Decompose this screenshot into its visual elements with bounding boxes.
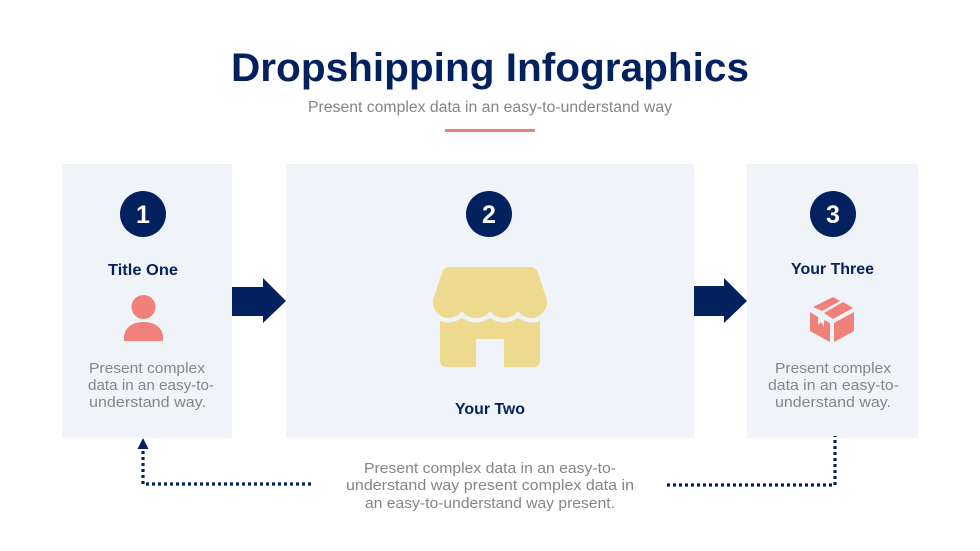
number badge 1 <box>120 191 166 237</box>
heading: your two: Your Two <box>455 401 525 418</box>
text block: step one: data in an easy-to- <box>88 377 214 394</box>
panel: step two <box>286 164 694 438</box>
text block: bottom description: understand way present complex data in <box>346 477 634 494</box>
number badge 2 <box>466 191 512 237</box>
text block: step three <box>768 360 899 411</box>
panel: step one <box>62 164 232 438</box>
text block: bottom description: an easy-to-understand way present. <box>365 495 615 512</box>
arrow: step one to two <box>232 278 286 323</box>
heading: title one: Title One <box>108 262 178 279</box>
text block: bottom description: Present complex data in an easy-to- <box>364 460 616 477</box>
text block: step three: Present complex <box>775 360 892 377</box>
number badge 3: 3 <box>826 201 840 229</box>
number badge 3 <box>810 191 856 237</box>
icon: package box <box>810 297 854 342</box>
text block: step three: data in an easy-to- <box>768 377 899 394</box>
arrow: step two to three <box>694 278 747 323</box>
number badge 2: 2 <box>482 201 496 229</box>
text block: step one <box>88 360 214 411</box>
text block: step three: understand way. <box>775 394 891 411</box>
dotted connector: right <box>667 436 835 485</box>
text block: step one: understand way. <box>89 394 206 411</box>
heading: your three: Your Three <box>791 261 874 278</box>
number badge 1: 1 <box>136 201 150 229</box>
icon: person <box>124 295 163 341</box>
dotted return arrow: left <box>138 438 311 484</box>
subtitle: Present complex data in an easy-to-understand way <box>308 99 672 116</box>
text block: step one: Present complex <box>89 360 206 377</box>
icon: storefront <box>433 267 547 367</box>
panel: step three <box>747 164 918 438</box>
title: Dropshipping Infographics <box>231 46 749 90</box>
text block: bottom description <box>346 460 634 512</box>
accent underline <box>445 129 535 132</box>
